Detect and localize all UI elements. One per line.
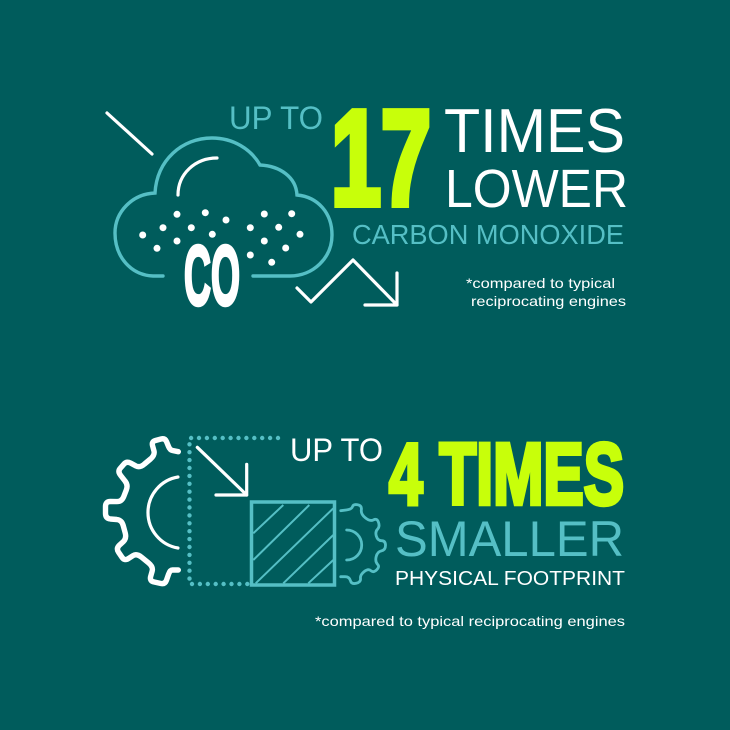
icon: shrink arrow [197,447,247,495]
heading: times: TIMES [444,97,625,166]
footnote: reciprocating engines [471,293,626,309]
panel: physical footprint [106,426,625,629]
heading: 4 times: 4 TIMES [389,426,624,523]
icon: CO cloud [107,113,332,322]
icon: small gear [341,505,386,584]
icon: hatched square [252,502,334,585]
cloud highlight arc [178,158,217,195]
icon: CO cloud: CO [184,228,240,322]
heading: smaller: SMALLER [395,511,624,567]
icon: zigzag down arrow [297,260,397,305]
footnote: *compared to typical reciprocating engines [315,613,625,629]
text: up to: UP TO [290,432,383,468]
text: carbon monoxide: CARBON MONOXIDE [352,219,624,250]
footnote: *compared to typical [466,275,615,291]
cloud outline [115,138,332,276]
particle dots [139,209,304,266]
icon: large gear [106,439,178,584]
text: physical footprint: PHYSICAL FOOTPRINT [395,567,625,590]
panel: carbon monoxide [107,82,628,322]
footnote [466,275,626,309]
text: up to: UP TO [229,100,323,136]
diagonal stroke [107,113,152,154]
dotted outline [190,438,278,584]
number: 17: 17 [331,82,431,234]
heading: lower: LOWER [445,159,628,219]
